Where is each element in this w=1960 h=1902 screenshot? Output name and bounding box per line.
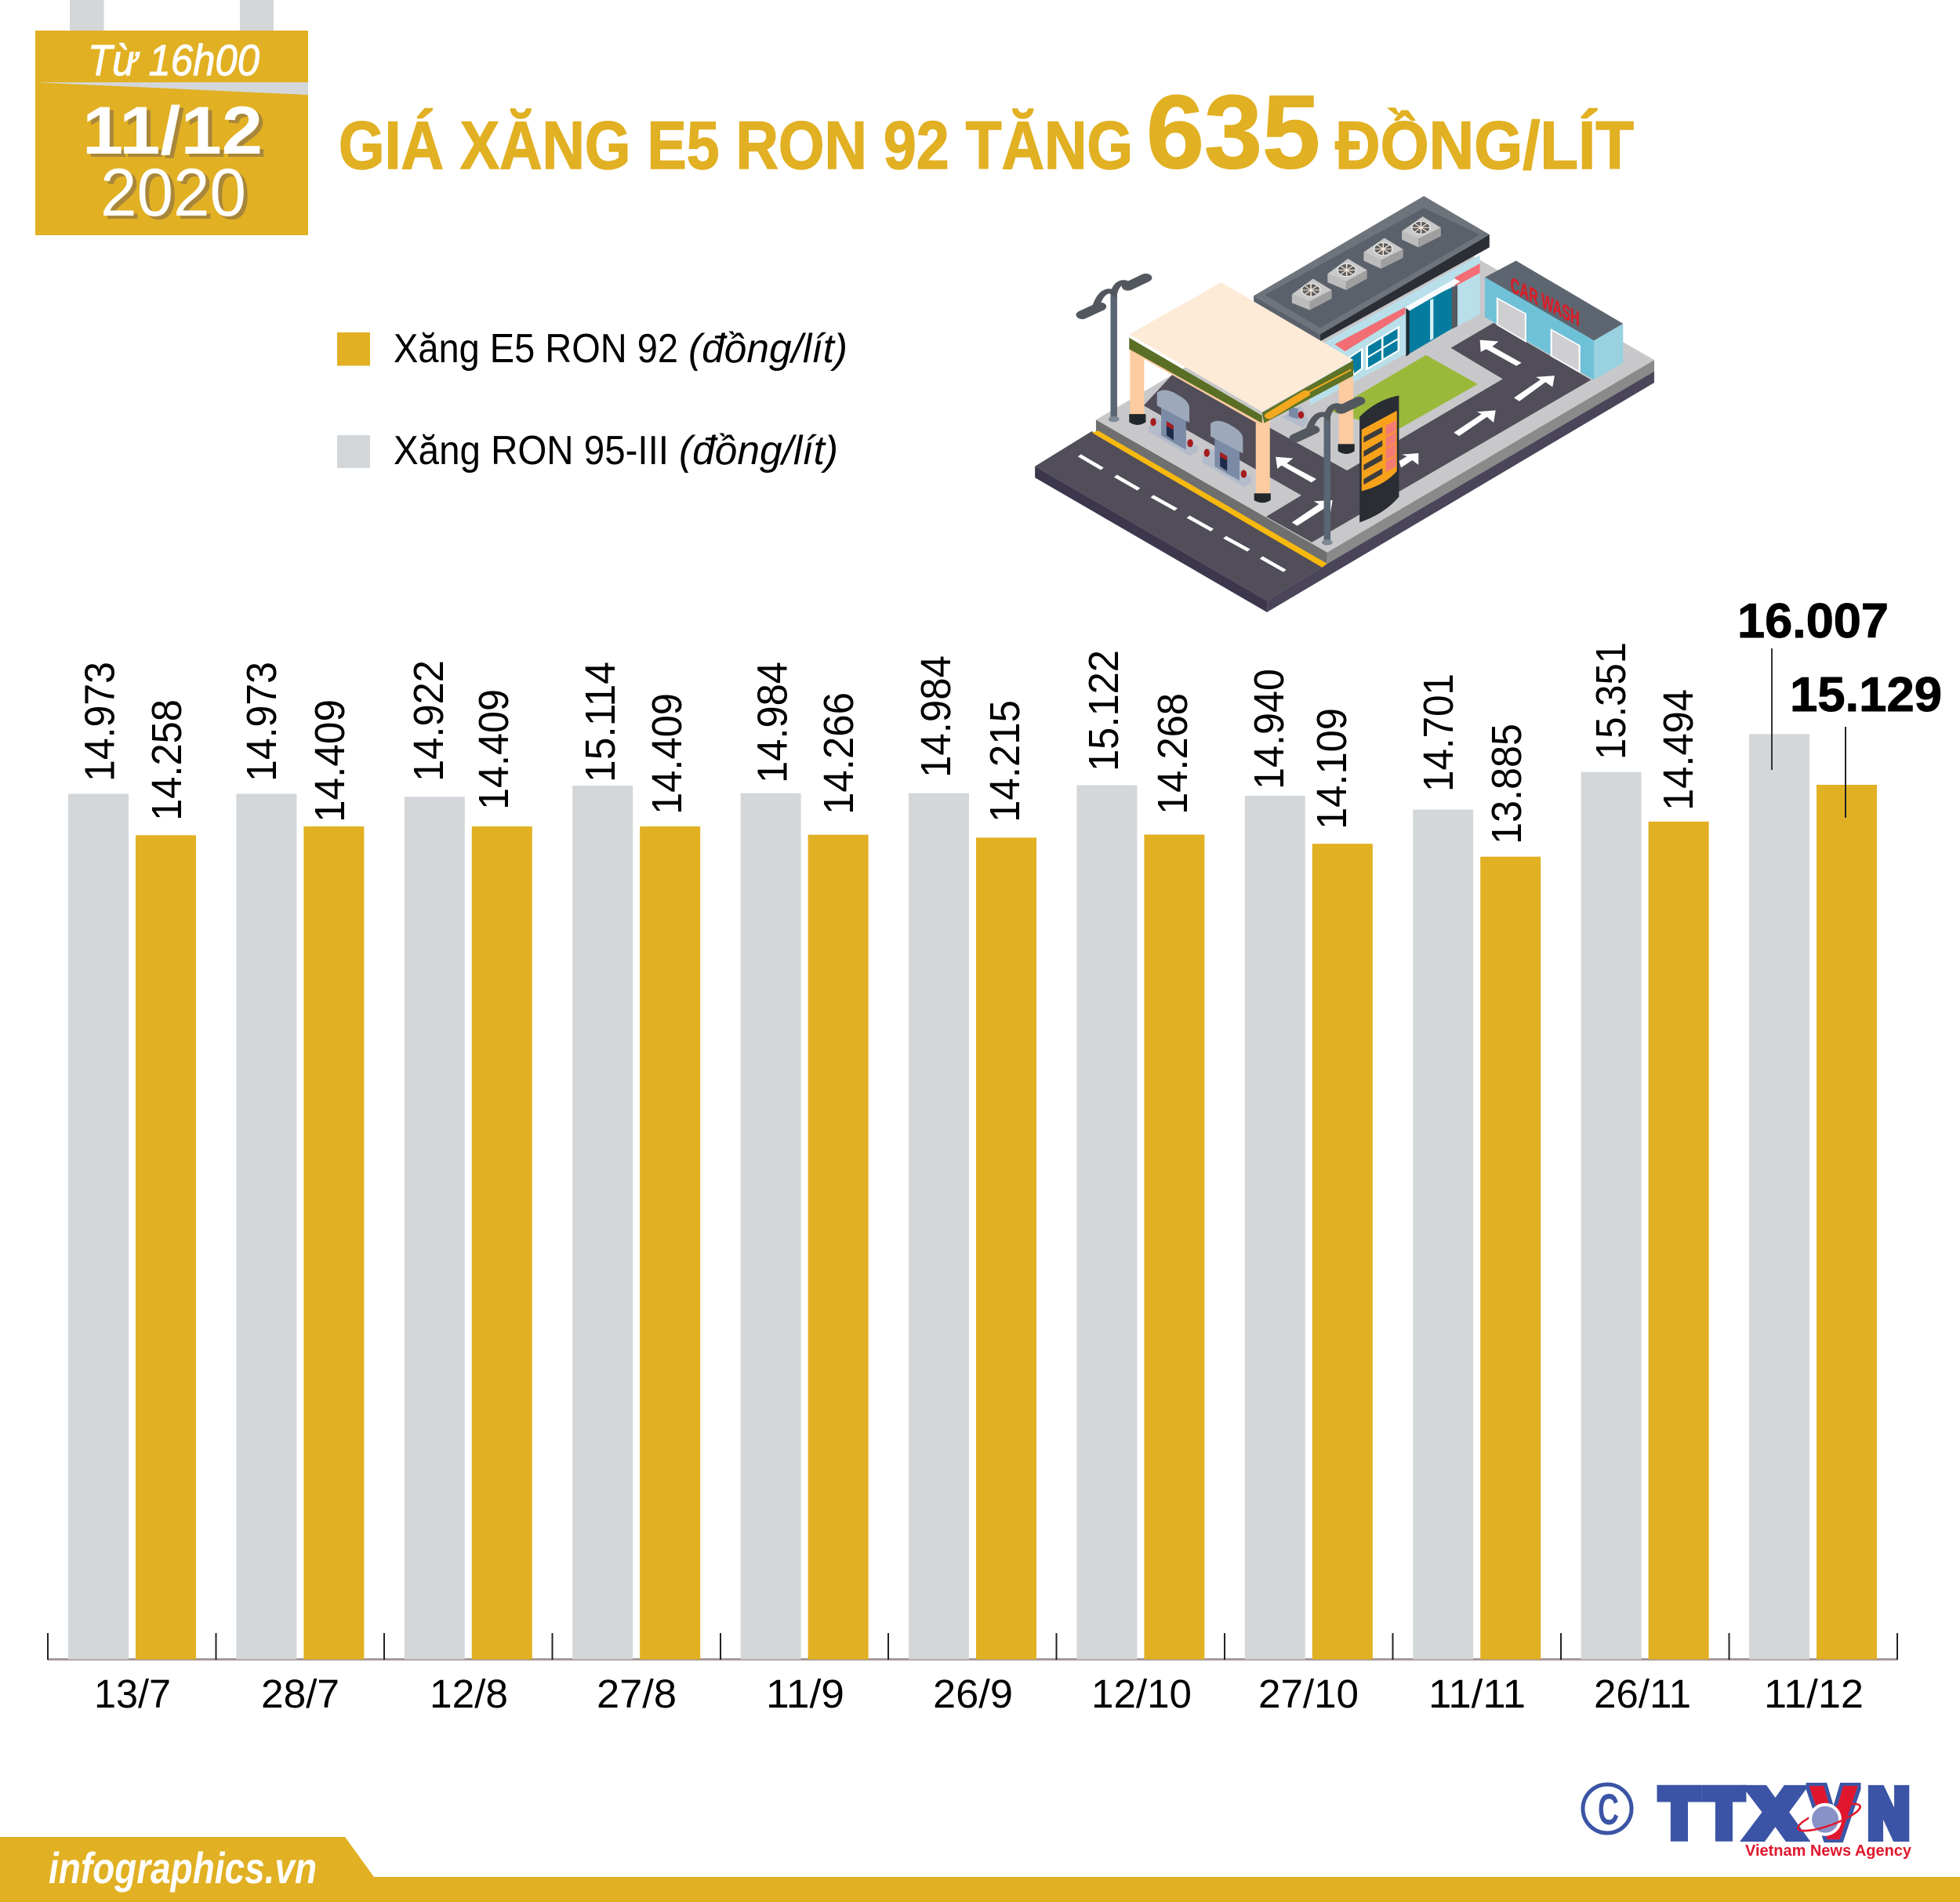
- group 11/9: [741, 662, 869, 1716]
- canopy front fascia: [1129, 338, 1262, 423]
- bar E5 RON 92: [303, 826, 364, 1659]
- back pump: [1282, 405, 1308, 428]
- roof frame: [1254, 196, 1490, 334]
- date label: 11/11: [1428, 1672, 1526, 1716]
- leader line RON 95-III: [1771, 648, 1773, 770]
- TTXVN wordmark: N: [1868, 1776, 1909, 1851]
- roof fascia: [1320, 234, 1490, 341]
- canopy under edge: [1129, 347, 1262, 426]
- car wash door two: [1552, 330, 1580, 372]
- TTXVN wordmark: T: [1661, 1775, 1698, 1852]
- road side faces: [1035, 466, 1267, 612]
- bar RON 95-III: [405, 797, 465, 1659]
- shop wall: [1310, 255, 1480, 405]
- year text: 2020: [100, 155, 246, 230]
- axis ticks: [47, 1633, 1898, 1660]
- door: [1406, 285, 1457, 356]
- bar RON 95-III: [741, 793, 801, 1660]
- bar E5 RON 92: [1144, 834, 1204, 1659]
- pump two: [1202, 421, 1251, 487]
- bar E5 RON 92: [1480, 857, 1541, 1659]
- car wash building: [1485, 261, 1623, 380]
- road dashes: [1080, 456, 1285, 571]
- bar E5 RON 92: [1312, 844, 1373, 1659]
- date label: 12/10: [1091, 1672, 1192, 1716]
- bar E5 RON 92: [1649, 822, 1709, 1659]
- legend unit E5 RON 92: (đồng/lít): [688, 326, 848, 372]
- grass: [1330, 355, 1478, 431]
- pylon orange panel: [1362, 411, 1397, 491]
- pylon price squares: [1385, 420, 1396, 472]
- bar RON 95-III: [572, 786, 633, 1659]
- bar E5 RON 92: [808, 835, 869, 1659]
- wall stripes: [1334, 307, 1405, 351]
- legend swatch RON 95-III: [337, 435, 370, 468]
- group 28/7: [236, 662, 364, 1716]
- fuel pumps: [1149, 390, 1308, 487]
- legend swatch E5 RON 92: [337, 332, 370, 365]
- car wash roof: [1485, 261, 1623, 340]
- value RON 95-III: 14.984: [913, 655, 960, 778]
- value RON 95-III bold: 16.007: [1737, 594, 1889, 648]
- date label: 13/7: [94, 1672, 171, 1716]
- calendar ring right: [240, 0, 274, 31]
- pylon body: [1359, 396, 1399, 522]
- group 11/12 highlighted: [1737, 594, 1942, 1716]
- value E5 RON 92: 14.409: [307, 699, 354, 822]
- bar chart: [47, 594, 1942, 1716]
- bar RON 95-III: [1581, 772, 1642, 1660]
- shop building: [1254, 196, 1490, 405]
- driveway asphalt: [1144, 323, 1592, 543]
- TTXVN wordmark: V: [1812, 1774, 1855, 1853]
- bar E5 RON 92: [136, 835, 196, 1659]
- date label: 28/7: [261, 1672, 339, 1716]
- road surface: [1035, 431, 1327, 601]
- group 26/9: [909, 655, 1036, 1716]
- bar E5 RON 92: [1817, 785, 1877, 1659]
- plaza side faces: [1096, 419, 1327, 564]
- calendar ring left: [70, 0, 104, 31]
- price sign pylon: [1359, 396, 1399, 522]
- pylon slots: [1363, 427, 1382, 485]
- date badge: [35, 0, 308, 235]
- driveway arrows: [1276, 340, 1555, 526]
- car wash building: CAR WASH: [1511, 272, 1580, 331]
- title part two: ĐỒNG/LÍT: [1335, 108, 1634, 183]
- value RON 95-III: 15.122: [1080, 650, 1127, 771]
- TTXVN wordmark: [1661, 1774, 1909, 1853]
- car wash door one: [1497, 299, 1526, 341]
- value E5 RON 92: 14.258: [143, 699, 191, 821]
- value RON 95-III: 14.701: [1415, 673, 1462, 792]
- group 12/10: [1076, 650, 1204, 1716]
- bar RON 95-III: [1245, 796, 1305, 1659]
- bar E5 RON 92: [640, 826, 700, 1659]
- value RON 95-III: 14.973: [77, 662, 124, 782]
- copyright mark: C: [1598, 1784, 1619, 1834]
- fold stripe: [35, 82, 308, 95]
- canopy: [1129, 282, 1355, 503]
- date text: 11/12: [82, 93, 263, 169]
- base right side: [1267, 372, 1654, 612]
- value E5 RON 92: 14.215: [982, 700, 1029, 822]
- canopy top: [1129, 282, 1353, 412]
- date label: 27/8: [597, 1672, 677, 1716]
- legend: [337, 326, 848, 474]
- AC units: [1292, 216, 1441, 310]
- value E5 RON 92: 13.885: [1483, 724, 1530, 844]
- plaza top: [1096, 227, 1654, 552]
- bar E5 RON 92: [472, 826, 532, 1659]
- bar RON 95-III: [1749, 734, 1809, 1659]
- legend label RON 95-III: Xăng RON 95-III: [394, 428, 669, 474]
- copyright mark: [1583, 1784, 1632, 1834]
- value RON 95-III: 15.351: [1588, 642, 1635, 760]
- value E5 RON 92 bold: 15.129: [1790, 668, 1942, 722]
- date label: 27/10: [1258, 1672, 1359, 1716]
- yellow road line: [1092, 430, 1327, 568]
- globe emblem: [1795, 1799, 1863, 1836]
- footer band: [0, 1837, 1960, 1902]
- illustration: isometric petrol station: [1035, 196, 1654, 612]
- roof inner: [1265, 208, 1480, 328]
- legend unit RON 95-III: (đồng/lít): [679, 428, 838, 474]
- legend label E5 RON 92: Xăng E5 RON 92: [394, 326, 678, 372]
- footer website text: infographics.vn: [49, 1843, 317, 1893]
- date label: 11/12: [1764, 1672, 1864, 1716]
- bar RON 95-III: [236, 793, 296, 1659]
- agency name: Vietnam News Agency: [1745, 1842, 1912, 1860]
- title: [339, 74, 1634, 191]
- value E5 RON 92: 14.266: [815, 692, 862, 815]
- bar RON 95-III: [1413, 810, 1473, 1659]
- window: [1367, 327, 1399, 369]
- value E5 RON 92: 14.409: [470, 689, 517, 810]
- pump one: [1149, 390, 1198, 456]
- bar RON 95-III: [68, 793, 129, 1659]
- value RON 95-III: 14.984: [750, 662, 797, 783]
- street lamp left: [1082, 278, 1145, 422]
- canopy orange sign: [1269, 394, 1305, 416]
- value E5 RON 92: 14.494: [1655, 689, 1702, 811]
- car wash front wall: [1485, 278, 1594, 380]
- leader line E5 RON 92: [1845, 727, 1846, 818]
- door header: [1405, 278, 1461, 311]
- car wash side wall: [1594, 324, 1623, 380]
- group 11/11: [1413, 673, 1541, 1716]
- TTXVN wordmark: X: [1749, 1775, 1802, 1852]
- group 27/8: [572, 662, 700, 1716]
- bar E5 RON 92: [976, 837, 1036, 1659]
- date label: 11/9: [766, 1672, 844, 1716]
- value RON 95-III: 14.940: [1246, 669, 1293, 789]
- footer shape: [0, 1837, 1960, 1902]
- badge background: [35, 31, 308, 235]
- date label: 26/9: [933, 1672, 1013, 1716]
- title part one: GIÁ XĂNG E5 RON 92 TĂNG: [339, 108, 1133, 183]
- value E5 RON 92: 14.268: [1149, 693, 1196, 815]
- canopy columns: [1130, 349, 1144, 417]
- bar RON 95-III: [1076, 786, 1137, 1659]
- TTXVN wordmark: T: [1705, 1775, 1743, 1852]
- value E5 RON 92: 14.109: [1308, 708, 1356, 829]
- group 12/8: [405, 660, 532, 1716]
- time text: Từ 16h00: [88, 35, 260, 85]
- value RON 95-III: 14.973: [238, 662, 285, 782]
- logo: copyright and TTXVN: [1583, 1774, 1912, 1860]
- date label: 26/11: [1594, 1672, 1691, 1716]
- canopy side fascia: [1262, 361, 1353, 423]
- value RON 95-III: 15.114: [577, 662, 624, 782]
- title highlighted number: 635: [1146, 74, 1320, 191]
- column bases: [1129, 414, 1145, 425]
- value RON 95-III: 14.922: [405, 660, 452, 782]
- axis line: [48, 1658, 1897, 1661]
- value E5 RON 92: 14.409: [644, 693, 691, 815]
- group 27/10: [1245, 669, 1373, 1716]
- group 13/7: [68, 662, 196, 1716]
- group 26/11: [1581, 642, 1709, 1716]
- street lamp right: [1296, 401, 1359, 545]
- bar RON 95-III: [909, 793, 969, 1660]
- date label: 12/8: [430, 1672, 508, 1716]
